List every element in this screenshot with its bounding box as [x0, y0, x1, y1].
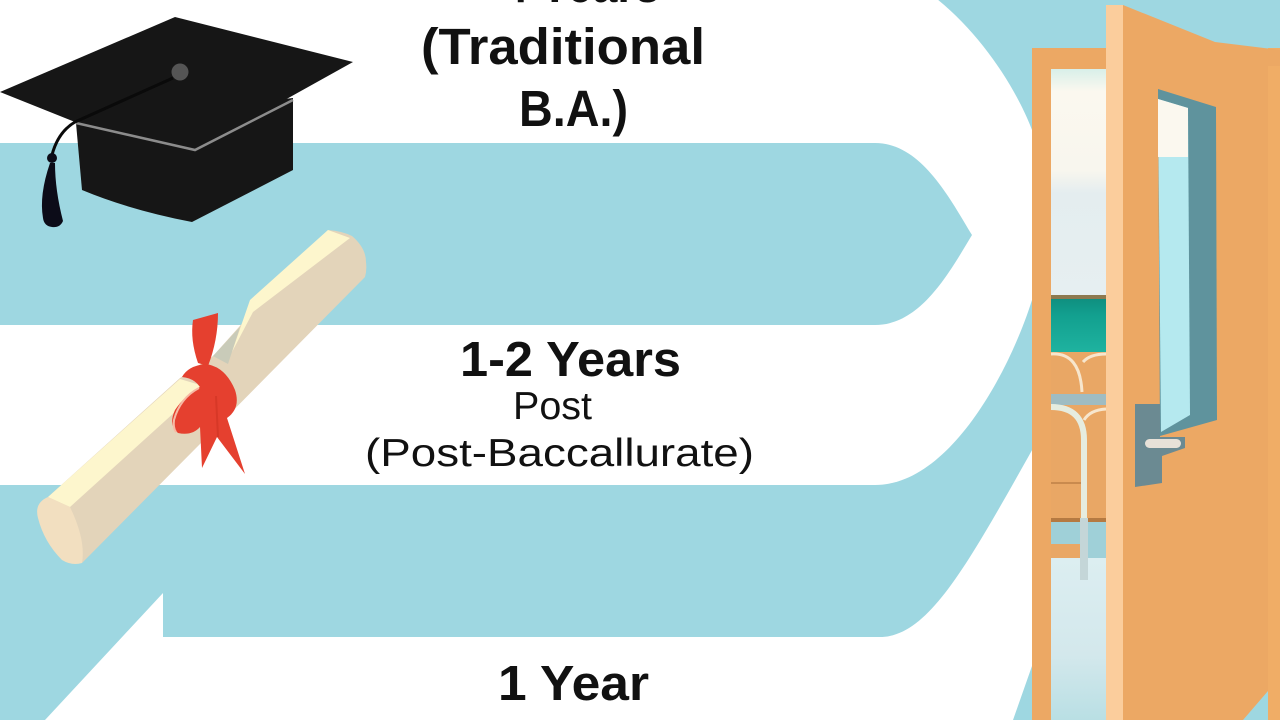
- text: B.A.: B.A.): [519, 80, 628, 137]
- door handle: [1135, 404, 1185, 487]
- door frame: [1032, 48, 1110, 720]
- icon: red ribbon: [172, 313, 245, 474]
- door edge: [1106, 5, 1123, 720]
- text: Post-Baccallurate: (Post-Baccallurate): [365, 432, 754, 475]
- icon: diploma scroll: [37, 230, 366, 564]
- door leaf: [1123, 5, 1280, 720]
- band: white top chevron: [0, 0, 1042, 485]
- band: teal chevron upper: [0, 143, 972, 325]
- text: 1-2 Years heading: 1-2 Years: [460, 333, 681, 387]
- icon: open door: [1032, 5, 1280, 720]
- door window: [1158, 89, 1217, 436]
- band: white lower chevron: [45, 436, 1040, 720]
- classroom interior: [1051, 69, 1107, 720]
- text: Post: Post: [513, 385, 592, 428]
- icon: graduation cap: [0, 17, 353, 227]
- text: 1 Year heading: 1 Year: [498, 657, 649, 711]
- right jamb: [1268, 48, 1280, 720]
- text: Traditional: (Traditional: [421, 18, 705, 75]
